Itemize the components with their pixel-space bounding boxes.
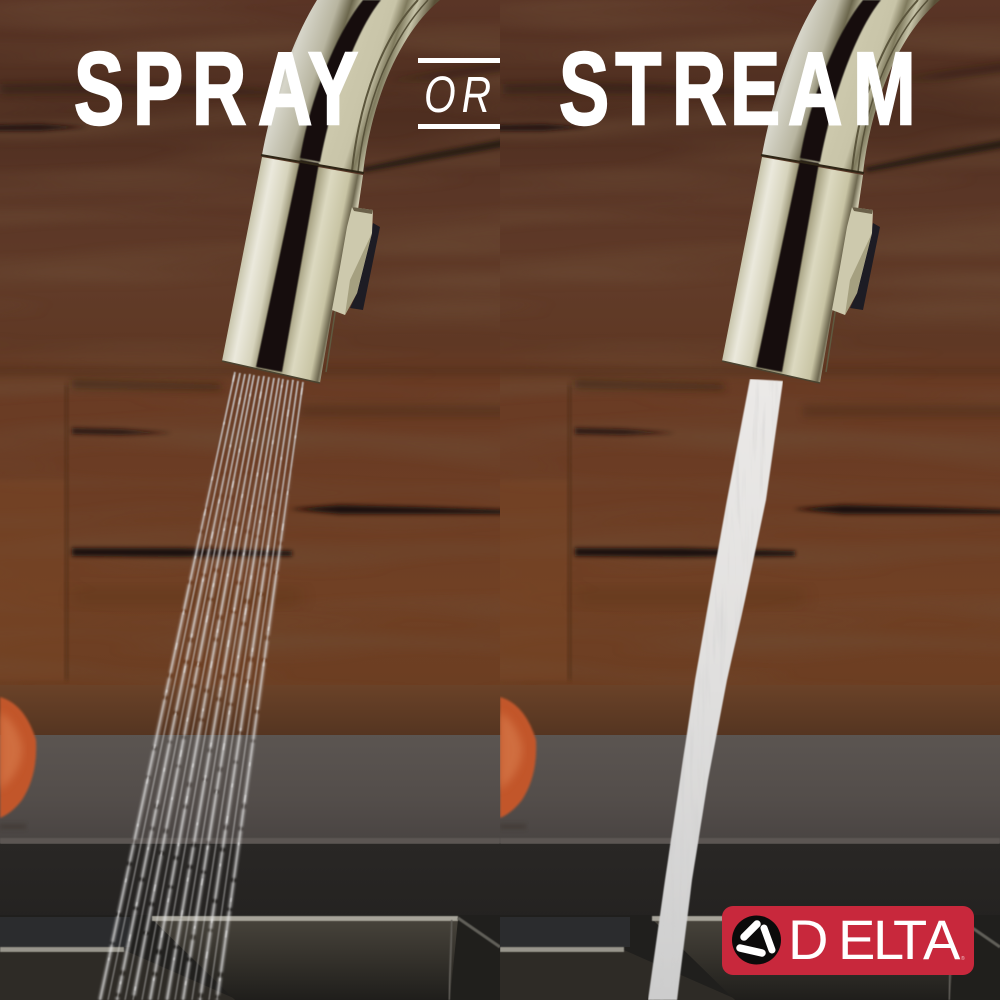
- logo: Delta badge: [722, 906, 974, 975]
- wood wall background: [0, 0, 510, 735]
- faucet head: [222, 0, 440, 383]
- title: stream: STREAM: [559, 31, 916, 147]
- title: spray: SPRAY: [74, 31, 358, 147]
- counter and sink background: [500, 697, 1000, 1000]
- divider word: or: OR: [424, 66, 491, 123]
- faucet head: [722, 0, 940, 383]
- wood wall background: [493, 0, 1000, 735]
- counter and sink background: [0, 697, 500, 1000]
- panel: spray photo: [0, 0, 510, 1000]
- panel: stream photo: [493, 0, 1000, 1000]
- stream of water: [648, 379, 783, 1000]
- icon: Delta triangle mark: [732, 916, 781, 964]
- logo: Delta badge: ®: [961, 955, 965, 962]
- spray water strands: [100, 372, 303, 1000]
- logo: Delta badge: DELTA: [788, 908, 961, 971]
- divider word: or: [418, 58, 500, 129]
